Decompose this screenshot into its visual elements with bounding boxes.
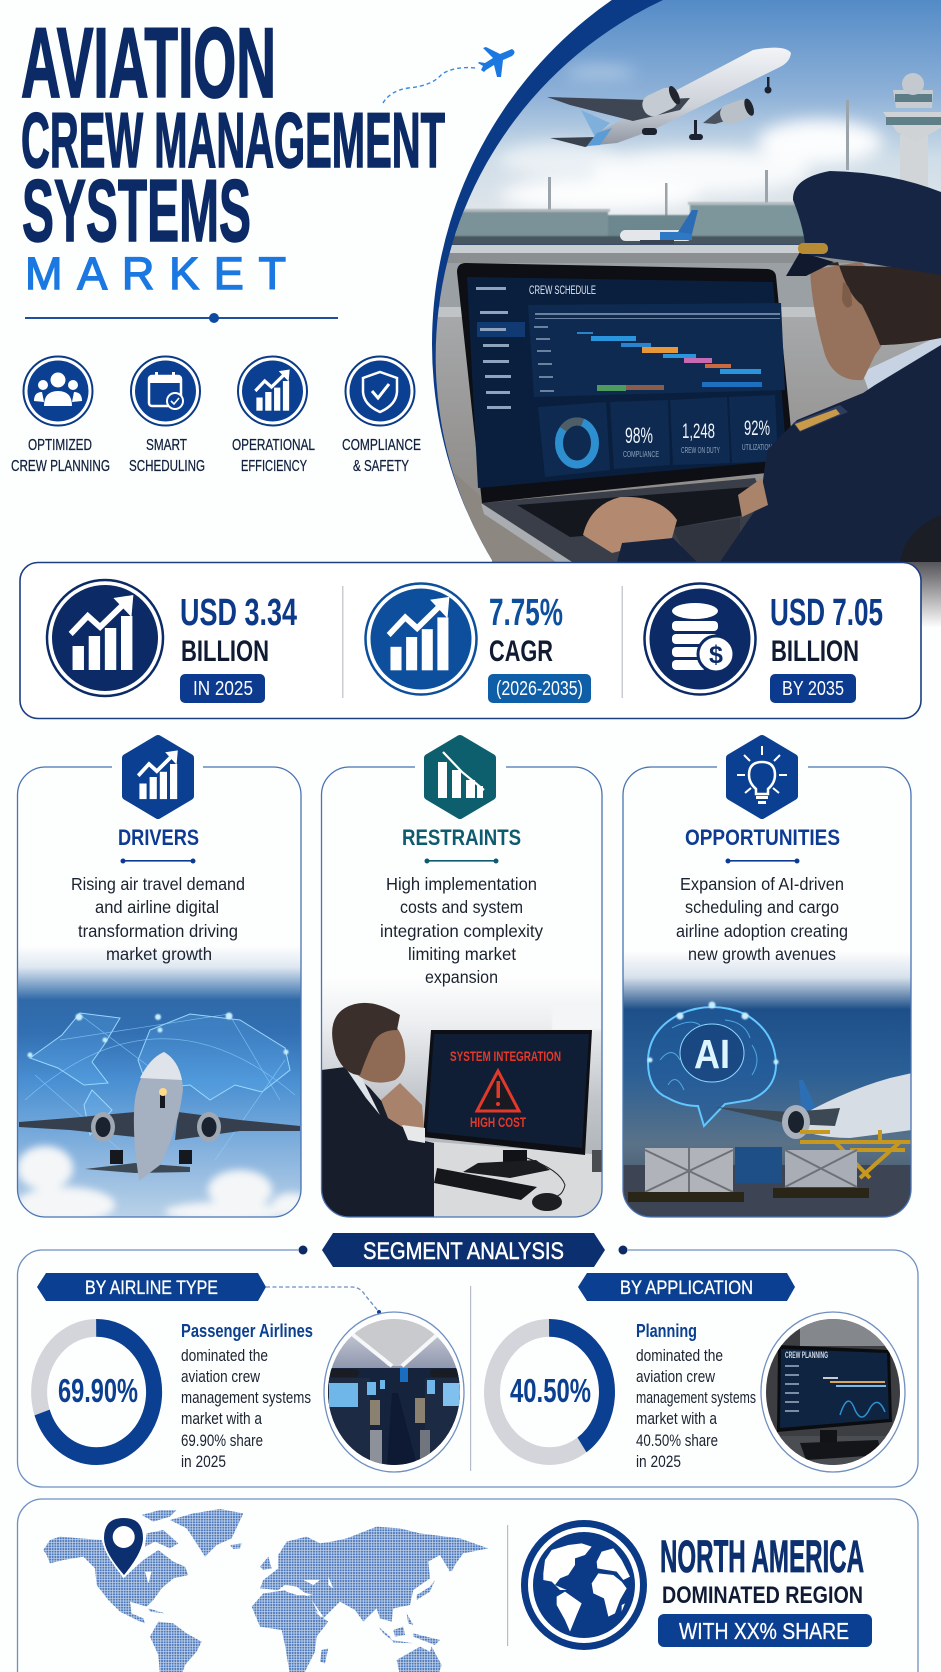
description: transformation driving <box>78 921 238 941</box>
stat: 7.75% CAGR 2026-2035: 7.75% <box>489 592 563 634</box>
title: Crew Management: CREW MANAGEMENT <box>21 96 445 184</box>
light poles <box>548 100 849 220</box>
label <box>129 437 205 475</box>
donut: 40.50% <box>492 1328 607 1456</box>
panel: key market statistics <box>20 562 921 718</box>
text: passenger airlines: market with a <box>181 1410 263 1428</box>
icon: hexagon chart <box>126 739 190 815</box>
hero photo: airport, aircraft, pilot and laptop <box>432 0 941 562</box>
dashboard metric 92%: UTILIZATION <box>742 443 772 452</box>
icon: globe <box>521 1520 647 1650</box>
control tower <box>883 73 941 195</box>
cargo loader <box>800 1130 912 1178</box>
airliner <box>19 1052 300 1181</box>
airport fence and ground <box>450 245 800 253</box>
text: passenger airlines: dominated the <box>181 1347 268 1365</box>
drivers image: aircraft over digital world map <box>15 945 312 1223</box>
text: planning: Planning <box>636 1321 697 1341</box>
heading underline <box>726 858 800 864</box>
icon: location pin <box>102 1516 145 1578</box>
text: passenger airlines: 69.90% share <box>181 1432 263 1450</box>
panel: opportunities <box>623 739 912 1220</box>
AI label: AI <box>694 1031 730 1077</box>
description: limiting market <box>408 944 516 964</box>
badge: 2026-2035 <box>488 674 591 703</box>
monitor <box>423 1030 592 1178</box>
section banner <box>298 1233 628 1267</box>
icon: shield <box>346 356 414 426</box>
text: planning: dominated the <box>636 1347 723 1365</box>
stat: 7.75% CAGR 2026-2035: CAGR <box>489 635 553 668</box>
businessman <box>321 1003 434 1217</box>
panel: regional analysis <box>18 1499 918 1672</box>
label: SMART <box>146 437 187 454</box>
section banner: SEGMENT ANALYSIS <box>363 1238 564 1265</box>
chair edge <box>900 515 941 562</box>
callout: north america dominated region: DOMINATED REGION <box>662 1582 863 1609</box>
text: passenger airlines <box>181 1321 313 1471</box>
gantt chart bars <box>528 303 785 397</box>
donut: 40.50%: 40.50% <box>510 1372 591 1409</box>
tag: by application <box>578 1273 795 1301</box>
icon: people <box>24 356 92 426</box>
title block <box>21 7 445 299</box>
laptop screen: crew schedule dashboard <box>457 263 795 503</box>
heading: DRIVERS <box>118 825 199 850</box>
description: expansion <box>425 967 498 987</box>
callout: north america dominated region <box>658 1531 872 1647</box>
badge: in 2025 <box>180 674 265 703</box>
tag: by airline type: BY AIRLINE TYPE <box>85 1278 218 1299</box>
stat: USD 7.05 billion by 2035: USD 7.05 <box>770 592 883 634</box>
dashboard metric 92%: 92% <box>744 417 770 440</box>
stat: USD 3.34 billion in 2025 <box>47 580 297 703</box>
title: Aviation: AVIATION <box>21 7 276 118</box>
description: integration complexity <box>380 921 543 941</box>
terminal building <box>430 202 810 245</box>
label: & SAFETY <box>353 458 409 475</box>
clouds <box>15 1146 312 1223</box>
description: scheduling and cargo <box>685 897 839 917</box>
stat: USD 7.05 billion by 2035: BILLION <box>771 635 859 668</box>
label: SCHEDULING <box>129 458 205 475</box>
title: Systems: SYSTEMS <box>22 161 251 260</box>
description: market growth <box>106 944 212 964</box>
connector: dashed line to photo <box>266 1287 381 1314</box>
panel: segment analysis <box>18 1233 918 1487</box>
stat: 7.75% CAGR 2026-2035 <box>366 584 591 703</box>
desk <box>426 1141 602 1216</box>
airplane taking off <box>547 48 791 147</box>
dashboard metric 1,248: CREW ON DUTY <box>681 446 720 455</box>
screen text: SYSTEM INTEGRATION <box>450 1048 561 1064</box>
description <box>71 874 245 964</box>
description: costs and system <box>400 897 523 917</box>
label: CREW PLANNING <box>11 458 110 475</box>
tag: by airline type <box>37 1273 266 1301</box>
donut: 69.90% <box>39 1328 154 1456</box>
badge: by 2035 <box>770 674 856 703</box>
badge: by 2035: BY 2035 <box>782 678 844 700</box>
text: passenger airlines: in 2025 <box>181 1453 226 1471</box>
icon: coins with dollar <box>644 584 756 694</box>
table surface <box>452 472 492 560</box>
dotted world map <box>43 1509 488 1672</box>
photo: crew planning monitor: CREW PLANNING <box>785 1350 828 1360</box>
text: passenger airlines: aviation crew <box>181 1368 260 1386</box>
dashboard metric 1,248 <box>681 424 720 453</box>
icon: hexagon declining chart <box>428 739 492 815</box>
icon: growth chart <box>366 584 476 694</box>
title: Market: MARKET <box>25 248 286 299</box>
badge: share <box>658 1614 872 1647</box>
heading underline <box>120 858 196 864</box>
laptop base and keyboard <box>481 478 756 562</box>
dashboard sidebar <box>476 287 525 409</box>
stat: USD 3.34 billion in 2025: BILLION <box>181 635 269 668</box>
dark wall strip <box>592 1150 602 1172</box>
monitor: HIGH COST <box>470 1114 526 1130</box>
ground <box>624 1165 910 1210</box>
donut: 69.90%: 69.90% <box>58 1372 138 1409</box>
heading: OPPORTUNITIES <box>685 825 840 850</box>
warning triangle <box>477 1071 519 1111</box>
text: planning: market with a <box>636 1410 718 1428</box>
description: Rising air travel demand <box>71 874 245 894</box>
feature: compliance and safety <box>342 356 421 475</box>
feature: operational efficiency <box>232 356 315 475</box>
badge: 2026-2035: (2026-2035) <box>496 678 583 700</box>
office window <box>552 1024 601 1030</box>
restraints image: man at monitor with warning <box>322 1001 602 1216</box>
icon: flight path and plane <box>383 47 514 103</box>
fade below hero <box>895 562 941 628</box>
photo: aircraft cabin <box>324 1312 464 1472</box>
description: High implementation <box>386 874 537 894</box>
keyboard and mouse <box>434 1158 565 1211</box>
stat: USD 3.34 billion in 2025: USD 3.34 <box>180 592 297 634</box>
icon: growth chart <box>47 580 163 696</box>
label: COMPLIANCE <box>342 437 421 454</box>
label: EFFICIENCY <box>241 458 307 475</box>
divider with dot <box>25 313 338 323</box>
label <box>342 437 421 475</box>
text: passenger airlines: management systems <box>181 1389 311 1407</box>
description <box>380 874 543 987</box>
dashboard cards <box>538 395 778 477</box>
text: planning: 40.50% share <box>636 1432 718 1450</box>
text: planning: aviation crew <box>636 1368 715 1386</box>
description: new growth avenues <box>688 944 836 964</box>
feature: optimized crew planning <box>11 356 110 475</box>
digital network map <box>30 1013 290 1135</box>
badge: in 2025: IN 2025 <box>193 678 253 700</box>
text: planning <box>636 1321 756 1471</box>
text: passenger airlines: Passenger Airlines <box>181 1321 313 1341</box>
stat: USD 7.05 billion by 2035 <box>644 584 883 703</box>
tag: by application: BY APPLICATION <box>620 1278 753 1299</box>
clouds <box>500 66 882 211</box>
pilot figure <box>583 171 941 562</box>
blue crescent frame <box>432 0 800 560</box>
description: airline adoption creating <box>676 921 848 941</box>
label: OPERATIONAL <box>232 437 315 454</box>
photo: crew planning monitor <box>761 1312 905 1472</box>
dashboard title: CREW SCHEDULE <box>529 283 596 297</box>
description <box>676 874 848 964</box>
dashboard donut <box>559 422 595 464</box>
dashboard metric 92% <box>742 420 772 450</box>
label <box>232 437 315 475</box>
dashboard metric 98%: COMPLIANCE <box>623 450 659 459</box>
panel: drivers <box>15 739 312 1223</box>
opportunities image: AI brain, aircraft and cargo <box>623 950 912 1220</box>
AI brain <box>648 1002 778 1126</box>
dashboard metric 1,248: 1,248 <box>682 420 715 443</box>
cargo containers <box>628 1147 869 1202</box>
heading underline <box>424 858 498 864</box>
dashboard metric 98%: 98% <box>625 423 653 448</box>
parked aircraft <box>620 210 698 244</box>
dashboard metric 98% <box>623 428 659 457</box>
heading: RESTRAINTS <box>402 825 521 850</box>
feature: smart scheduling <box>129 356 205 475</box>
description: and airline digital <box>95 897 219 917</box>
label: OPTIMIZED <box>28 437 92 454</box>
icon: coins with dollar: $ <box>709 641 723 669</box>
description: Expansion of AI-driven <box>680 874 844 894</box>
cargo aircraft <box>715 1073 912 1139</box>
icon: chart <box>238 356 307 426</box>
text: planning: in 2025 <box>636 1453 681 1471</box>
icon: hexagon light bulb <box>730 739 794 815</box>
badge: share: WITH XX% SHARE <box>679 1618 849 1644</box>
label <box>11 437 110 475</box>
icon: calendar <box>131 356 200 426</box>
text: planning: management systems <box>636 1389 756 1407</box>
panel: restraints <box>321 739 603 1220</box>
